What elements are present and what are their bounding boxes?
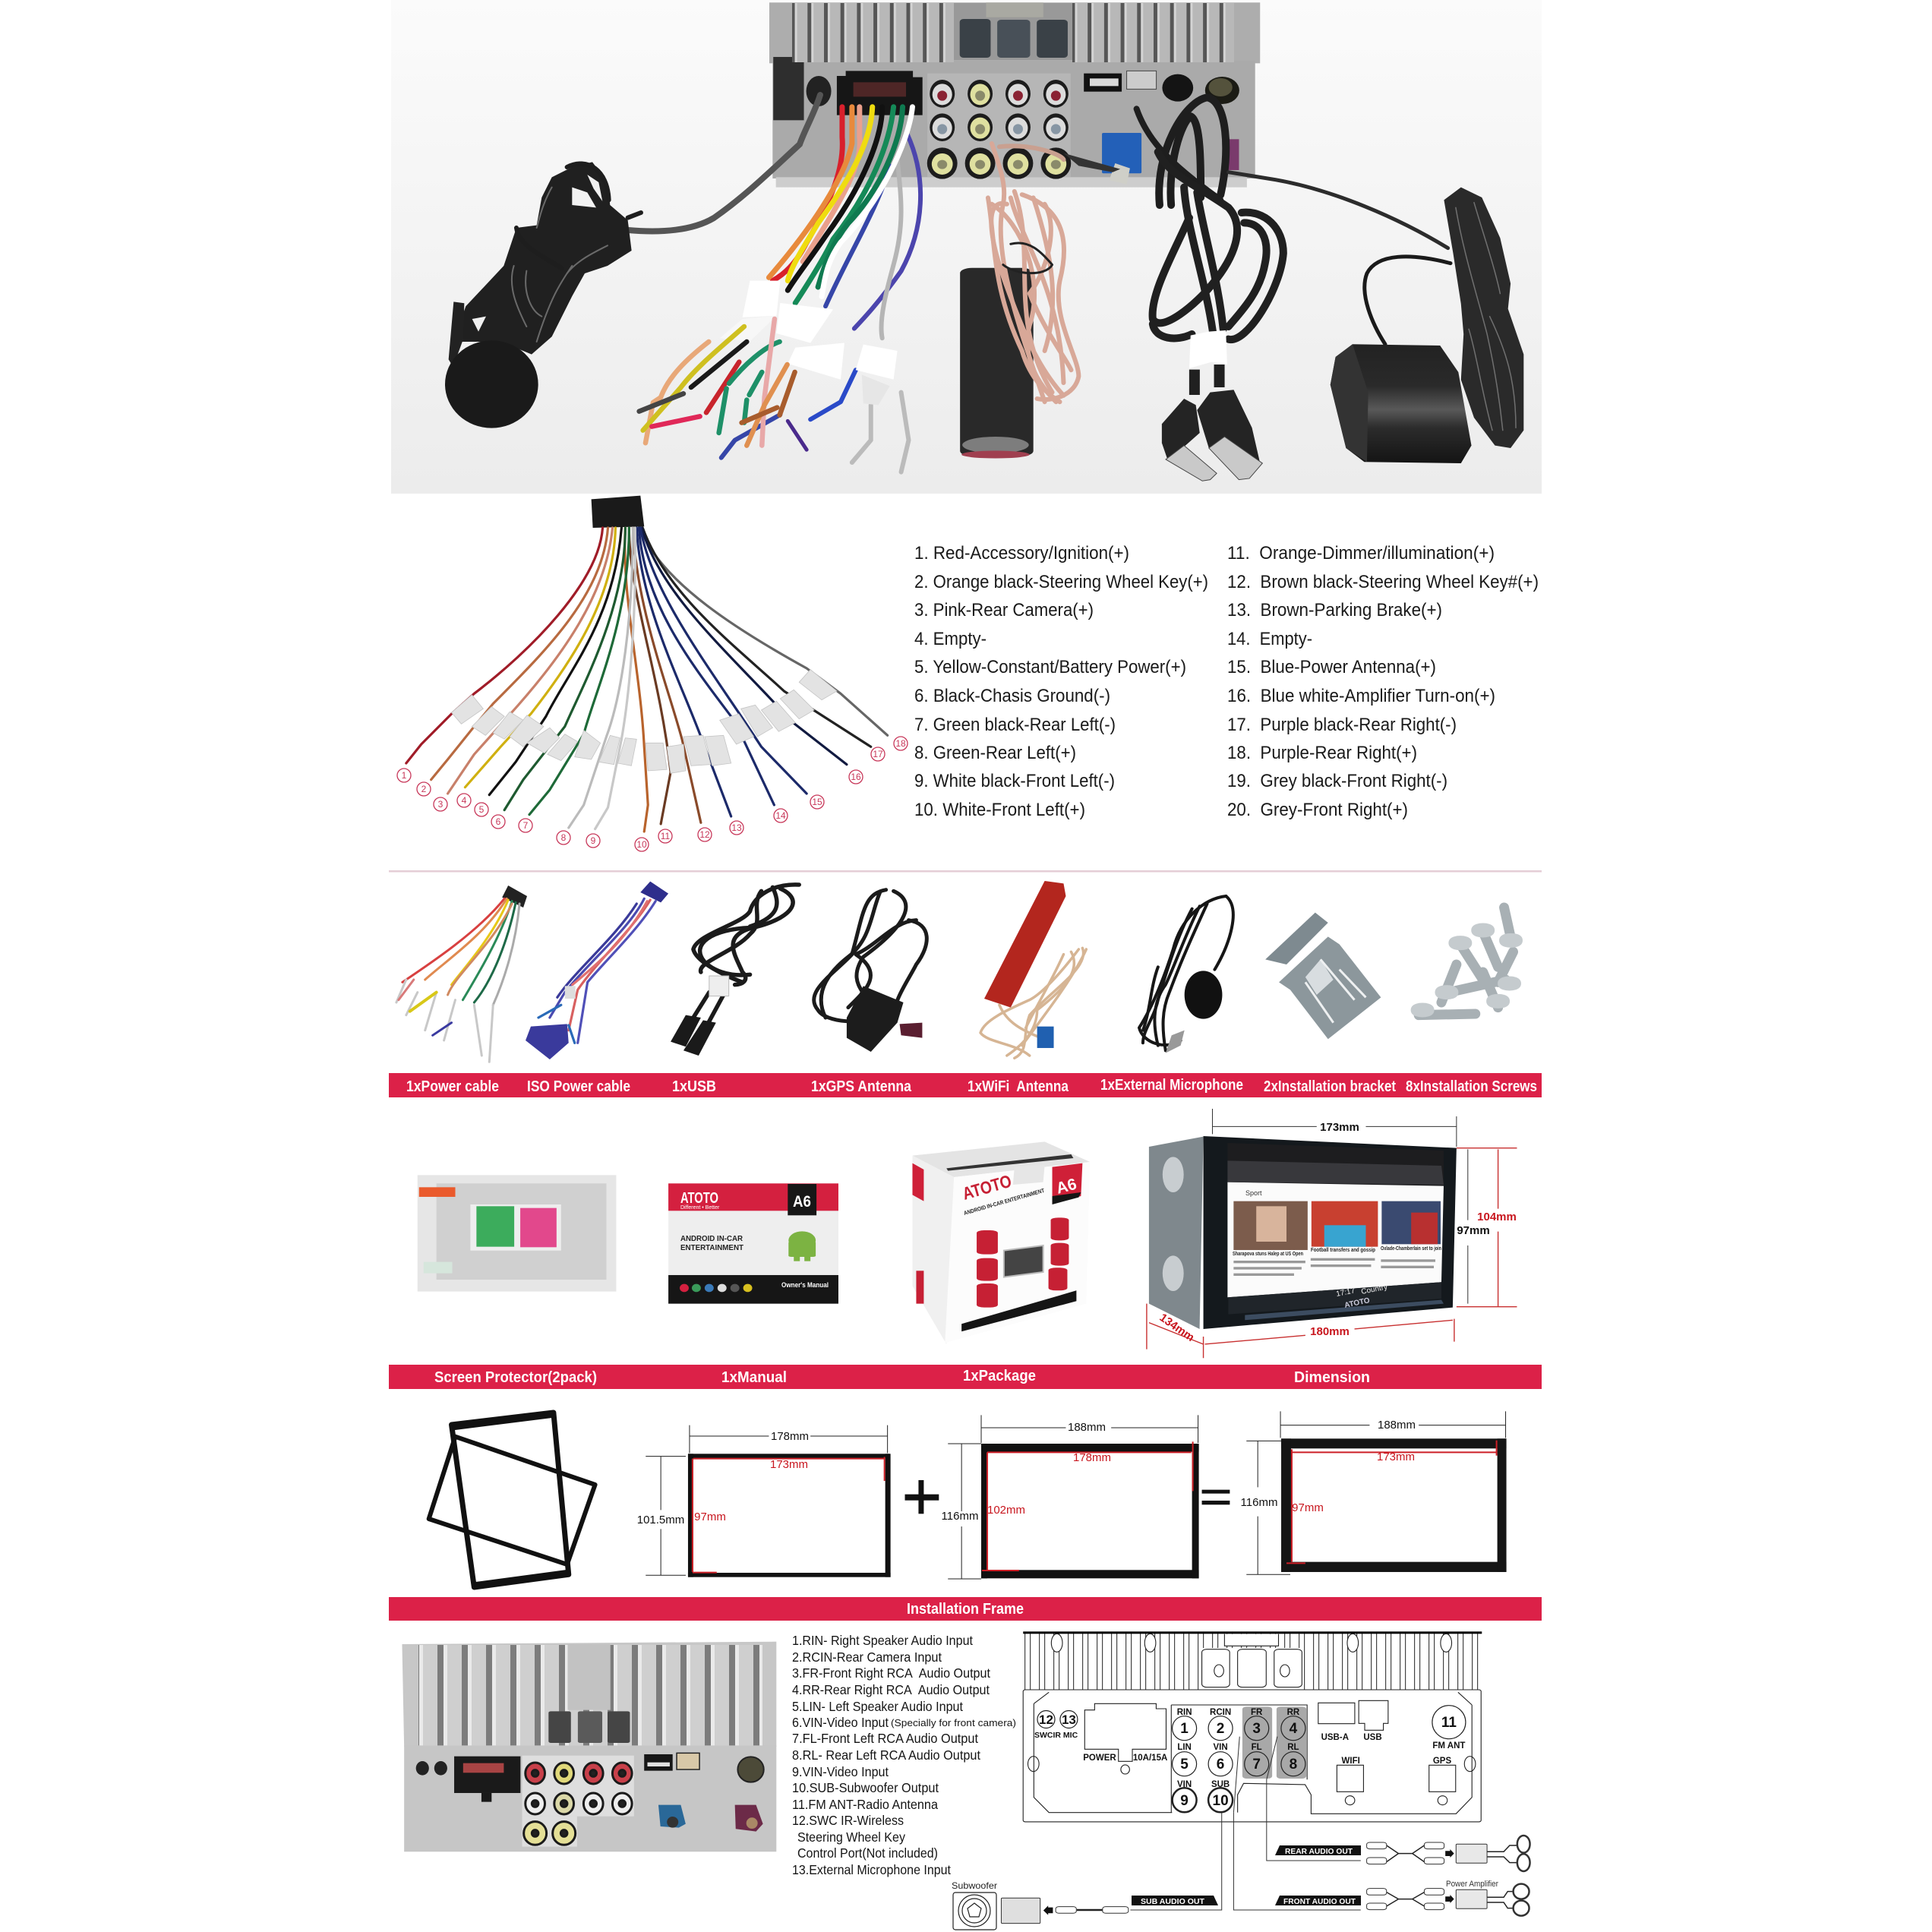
text block: port descriptions: 9.VIN-Video Input <box>792 1764 889 1779</box>
banner: package contents and dimension: Dimension <box>1294 1369 1370 1386</box>
banner: accessory names: 1xUSB <box>672 1078 716 1095</box>
audio output tags <box>1132 1845 1498 1906</box>
frame dimension labels <box>637 1419 1416 1526</box>
banner: package contents and dimension: 1xManual <box>721 1369 787 1386</box>
icon: rolled wifi antenna <box>960 144 1120 459</box>
port name labels: FM ANT <box>1432 1741 1465 1750</box>
numbered wire markers: 10 <box>636 839 647 850</box>
wire colour legend, left column: 9. White black-Front Left(-) <box>914 771 1115 791</box>
fins on head unit <box>792 3 1234 62</box>
panel: head unit dimensions: Oxlade-Chamberlain set to join <box>1381 1246 1441 1252</box>
audio output tags: FRONT AUDIO OUT <box>1283 1897 1356 1906</box>
banner: package contents and dimension <box>389 1365 1542 1389</box>
port name labels: SUB <box>1211 1780 1230 1789</box>
numbered port circles: 6 <box>1217 1757 1224 1773</box>
text block: port descriptions: 8.RL- Rear Left RCA Audio Output <box>792 1747 980 1763</box>
frame dimension labels: 116mm <box>1241 1496 1277 1509</box>
panel: head unit dimensions: Football transfers and gossip <box>1311 1248 1375 1253</box>
banner: accessory names <box>389 1073 1542 1097</box>
icon: power cable <box>396 886 527 1062</box>
head unit rear <box>769 2 1260 188</box>
panel: retail package: A6 <box>1054 1176 1078 1198</box>
numbered wire markers: 13 <box>731 822 742 833</box>
text block: port descriptions: Control Port(Not included) <box>797 1845 938 1861</box>
panel: owner's manual: Different • Better <box>680 1205 720 1211</box>
numbered port circles <box>1037 1706 1466 1812</box>
port name labels: 10A/15A <box>1133 1754 1167 1763</box>
frame dimension labels: 102mm <box>987 1504 1025 1517</box>
panel: head unit dimensions: Country <box>1360 1283 1388 1296</box>
frame dimension labels: 173mm <box>1377 1451 1415 1463</box>
text block: port descriptions: 1.RIN- Right Speaker Audio Input <box>792 1633 973 1648</box>
banner: installation frame: Installation Frame <box>907 1601 1024 1618</box>
wire ends <box>639 319 795 446</box>
wire colour legend, left column <box>914 543 1208 820</box>
numbered port circles: 13 <box>1062 1713 1076 1727</box>
numbered wire markers: 18 <box>895 738 906 749</box>
wire colour legend, right column: 11. Orange-Dimmer/illumination(+) <box>1227 543 1495 564</box>
port name labels: RL <box>1287 1743 1299 1752</box>
audio output tags: SUB AUDIO OUT <box>1141 1897 1205 1906</box>
panel: head unit dimensions: 173mm <box>1320 1121 1359 1134</box>
wire colour legend, right column: 19. Grey black-Front Right(-) <box>1227 771 1447 791</box>
wire colour legend, right column: 20. Grey-Front Right(+) <box>1227 800 1408 820</box>
panel: owner's manual: ATOTO <box>680 1190 718 1207</box>
audio output tags: REAR AUDIO OUT <box>1285 1847 1353 1856</box>
banner: installation frame <box>389 1597 1542 1621</box>
audio output wiring <box>1001 1737 1530 1924</box>
banner: accessory names: 1xGPS Antenna <box>811 1078 912 1095</box>
numbered wire markers: 11 <box>661 831 671 841</box>
port name labels: RCIN <box>1210 1708 1231 1717</box>
text block: port descriptions: 12.SWC IR-Wireless <box>792 1813 904 1828</box>
numbered wire markers: 17 <box>873 749 883 759</box>
frame dimension labels: 173mm <box>770 1458 808 1471</box>
frame dimension labels: 97mm <box>1292 1501 1324 1514</box>
numbered wire markers: 15 <box>812 797 822 807</box>
frame dimension labels: 97mm <box>694 1511 726 1523</box>
icon: installation bracket <box>1265 913 1381 1039</box>
numbered wire markers: 16 <box>851 772 861 782</box>
port name labels: POWER <box>1083 1754 1116 1763</box>
panel: owner's manual: A6 <box>793 1193 811 1211</box>
banner: package contents and dimension: Screen Protector(2pack) <box>434 1369 597 1386</box>
wire colour legend, left column: 6. Black-Chasis Ground(-) <box>914 686 1110 706</box>
wire colour legend, left column: 10. White-Front Left(+) <box>914 800 1085 820</box>
panel: product photo with wiring <box>391 0 1542 494</box>
panel: head unit dimensions: Sharapova stuns Halep at US Open <box>1233 1252 1303 1257</box>
wiring harness <box>639 107 920 472</box>
icon: WiFi antenna <box>980 881 1086 1058</box>
numbered wire markers: 14 <box>775 810 786 821</box>
icon: ISO power cable <box>526 882 668 1059</box>
numbered port circles: 1 <box>1180 1721 1189 1737</box>
wire colour legend, left column: 4. Empty- <box>914 629 987 649</box>
port name labels: LIN <box>1177 1743 1192 1752</box>
frame one: 178mm by 101.5mm <box>646 1425 891 1577</box>
panel: owner's manual <box>668 1183 838 1304</box>
RCA sockets <box>927 80 1071 179</box>
panel: accessories row <box>396 881 1517 1062</box>
banner: accessory names: 1xExternal Microphone <box>1100 1077 1243 1094</box>
numbered port circles: 11 <box>1441 1715 1457 1731</box>
panel: head unit dimensions: 180mm <box>1310 1325 1350 1338</box>
text block: port descriptions <box>792 1633 1016 1877</box>
numbered port circles: 5 <box>1180 1757 1189 1773</box>
numbered wire markers: 4 <box>462 795 467 806</box>
wire colour legend, left column: 1. Red-Accessory/Ignition(+) <box>914 543 1129 564</box>
icon: GPS antenna <box>814 890 927 1052</box>
port name labels: VIN <box>1214 1743 1228 1752</box>
equals sign <box>1202 1490 1230 1504</box>
numbered wire markers: 5 <box>479 804 485 815</box>
panel: installation frames <box>429 1411 1507 1588</box>
numbered port circles: 8 <box>1290 1757 1297 1773</box>
text block: port descriptions: 10.SUB-Subwoofer Output <box>792 1780 939 1795</box>
panel: head unit dimensions: 97mm <box>1457 1224 1490 1237</box>
banner: accessory names: 2xInstallation bracket <box>1264 1078 1396 1095</box>
port name labels: USB <box>1363 1733 1382 1742</box>
text block: port descriptions: 2.RCIN-Rear Camera Input <box>792 1649 942 1665</box>
banner: package contents and dimension: 1xPackage <box>963 1368 1036 1384</box>
icon: USB cable <box>671 885 799 1056</box>
numbered wire markers: 6 <box>496 816 501 827</box>
numbered port circles: 7 <box>1252 1757 1261 1773</box>
panel: head unit dimensions: 134mm <box>1157 1312 1197 1344</box>
frame three: combined <box>1246 1411 1507 1574</box>
text block: port descriptions: 11.FM ANT-Radio Antenna <box>792 1797 938 1812</box>
wire colour legend, left column: 8. Green-Rear Left(+) <box>914 743 1076 763</box>
port name labels: RR <box>1287 1708 1300 1717</box>
frame dimension labels: 116mm <box>942 1510 978 1523</box>
text block: port descriptions: 5.LIN- Left Speaker Audio Input <box>792 1699 963 1714</box>
numbered port circles: 2 <box>1217 1721 1224 1737</box>
text block: port descriptions: 4.RR-Rear Right RCA Audio Output <box>792 1682 990 1697</box>
diagram fins <box>1023 1633 1481 1692</box>
numbered wire markers: 12 <box>699 829 710 840</box>
audio output tags: Power Amplifier <box>1446 1880 1498 1889</box>
plus sign <box>905 1480 939 1514</box>
text block: port descriptions: 3.FR-Front Right RCA Audio Output <box>792 1665 990 1681</box>
panel: screen protector <box>418 1175 616 1292</box>
banner: accessory names: 1xWiFi Antenna <box>968 1078 1069 1095</box>
numbered wire markers <box>397 737 908 851</box>
frame two: 188mm by 116mm <box>948 1415 1199 1579</box>
numbered port circles: 4 <box>1290 1721 1298 1737</box>
text block: port descriptions: (Specially for front camera) <box>891 1717 1016 1728</box>
text block: port descriptions: 6.VIN-Video Input <box>792 1715 889 1730</box>
numbered wire markers: 8 <box>561 832 567 843</box>
panel: wiring harness diagram <box>397 496 1539 851</box>
icon: subwoofer: Subwoofer <box>952 1880 997 1891</box>
panel: retail package <box>912 1141 1090 1344</box>
port name labels: FR <box>1251 1708 1263 1717</box>
icon: USB cables <box>1137 97 1283 481</box>
numbered wire markers: 3 <box>438 799 444 810</box>
numbered port circles: 3 <box>1252 1721 1261 1737</box>
icon: microphone with coiled cable <box>445 95 820 428</box>
panel: owner's manual: ENTERTAINMENT <box>680 1244 743 1252</box>
frame dimension labels: 101.5mm <box>637 1514 684 1526</box>
wire colour legend, right column: 17. Purple black-Rear Right(-) <box>1227 715 1457 735</box>
numbered wire markers: 9 <box>591 835 596 846</box>
wire colour legend, right column: 15. Blue-Power Antenna(+) <box>1227 657 1436 677</box>
panel: head unit dimensions: ATOTO <box>1343 1296 1371 1310</box>
icon: installation screws <box>1416 908 1517 1015</box>
panel: head unit dimensions: 17:17 <box>1335 1286 1356 1299</box>
numbered wire markers: 1 <box>402 770 407 781</box>
wire colour legend, left column: 5. Yellow-Constant/Battery Power(+) <box>914 657 1186 677</box>
wire colour legend, right column: 16. Blue white-Amplifier Turn-on(+) <box>1227 686 1495 706</box>
wire colour legend, right column <box>1227 543 1539 820</box>
panel: head unit dimensions: 104mm <box>1477 1211 1517 1223</box>
port name labels: USB-A <box>1321 1733 1349 1742</box>
numbered wire markers: 7 <box>523 820 529 831</box>
port name labels: VIN <box>1177 1780 1192 1789</box>
numbered wire markers: 2 <box>421 784 427 794</box>
panel: head unit dimensions <box>1147 1109 1517 1358</box>
banner: accessory names: 1xPower cable <box>406 1078 499 1095</box>
icon: external microphone <box>1139 896 1233 1053</box>
panel: connection diagram <box>952 1631 1530 1930</box>
diagram outline and ports <box>1023 1631 1482 1822</box>
panel: owner's manual: Owner's Manual <box>781 1281 829 1289</box>
frame dimension labels: 188mm <box>1068 1421 1106 1434</box>
port name labels: RIN <box>1177 1708 1192 1717</box>
port name labels: FL <box>1252 1743 1262 1752</box>
numbered port circles: 9 <box>1180 1793 1189 1809</box>
icon: subwoofer <box>952 1880 997 1930</box>
text block: port descriptions: Steering Wheel Key <box>797 1829 905 1845</box>
frame dimension labels: 178mm <box>1073 1451 1111 1464</box>
numbered port circles: 12 <box>1039 1713 1053 1727</box>
wire colour legend, right column: 18. Purple-Rear Right(+) <box>1227 743 1417 763</box>
icon: GPS antenna <box>1229 172 1523 463</box>
wire colour legend, right column: 12. Brown black-Steering Wheel Key#(+) <box>1227 572 1539 592</box>
banner: accessory names: 8xInstallation Screws <box>1406 1078 1537 1095</box>
icon: two frames overlapped <box>429 1412 595 1588</box>
panel: rear view photo <box>402 1642 776 1852</box>
banner: accessory names: ISO Power cable <box>527 1078 630 1095</box>
wire colour legend, right column: 14. Empty- <box>1227 629 1312 649</box>
panel: owner's manual: ANDROID IN-CAR <box>680 1235 743 1243</box>
text block: port descriptions: 13.External Microphone Input <box>792 1862 951 1877</box>
harness connector and wires <box>406 496 888 832</box>
panel: head unit dimensions: Sport <box>1245 1189 1262 1197</box>
port name labels: WIFI <box>1342 1757 1360 1766</box>
wire colour legend, left column: 2. Orange black-Steering Wheel Key(+) <box>914 572 1208 592</box>
wire colour legend, right column: 13. Brown-Parking Brake(+) <box>1227 600 1442 620</box>
wire colour legend, left column: 7. Green black-Rear Left(-) <box>914 715 1116 735</box>
frame dimension labels: 188mm <box>1378 1419 1416 1432</box>
text block: port descriptions: 7.FL-Front Left RCA Audio Output <box>792 1731 978 1746</box>
numbered port circles: 10 <box>1213 1793 1229 1809</box>
panel: retail package: ANDROID IN-CAR ENTERTAINMENT <box>963 1187 1046 1217</box>
port name labels <box>1034 1708 1465 1789</box>
frame dimension labels: 178mm <box>771 1430 809 1443</box>
port name labels: SWCIR MIC <box>1034 1731 1078 1740</box>
port name labels: GPS <box>1433 1757 1451 1766</box>
wire colour legend, left column: 3. Pink-Rear Camera(+) <box>914 600 1094 620</box>
panel: retail package: ATOTO <box>960 1171 1014 1204</box>
